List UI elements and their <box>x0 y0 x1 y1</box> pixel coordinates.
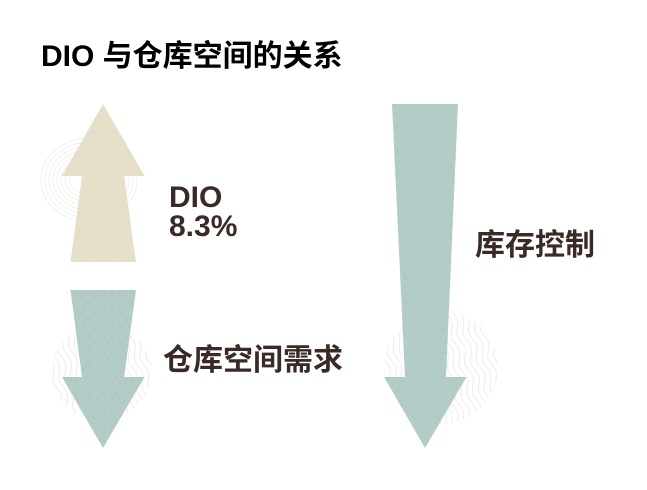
label: DIO 8.3%: DIO <box>169 181 222 214</box>
title: DIO 与仓库空间的关系 <box>41 40 343 73</box>
arrow: inventory control down <box>384 104 466 448</box>
arrow: warehouse space demand down <box>62 290 144 448</box>
label: warehouse space demand: 仓库空间需求 <box>163 344 343 377</box>
label: inventory control: 库存控制 <box>475 229 595 262</box>
texture: fingerprint behind large arrow <box>384 310 498 424</box>
label: DIO 8.3%: 8.3% <box>169 210 237 243</box>
texture: fingerprint behind small down arrow <box>52 324 152 420</box>
arrow: DIO up <box>62 104 144 262</box>
label: DIO 8.3% <box>169 181 237 243</box>
texture: fingerprint behind up arrow <box>41 138 137 222</box>
